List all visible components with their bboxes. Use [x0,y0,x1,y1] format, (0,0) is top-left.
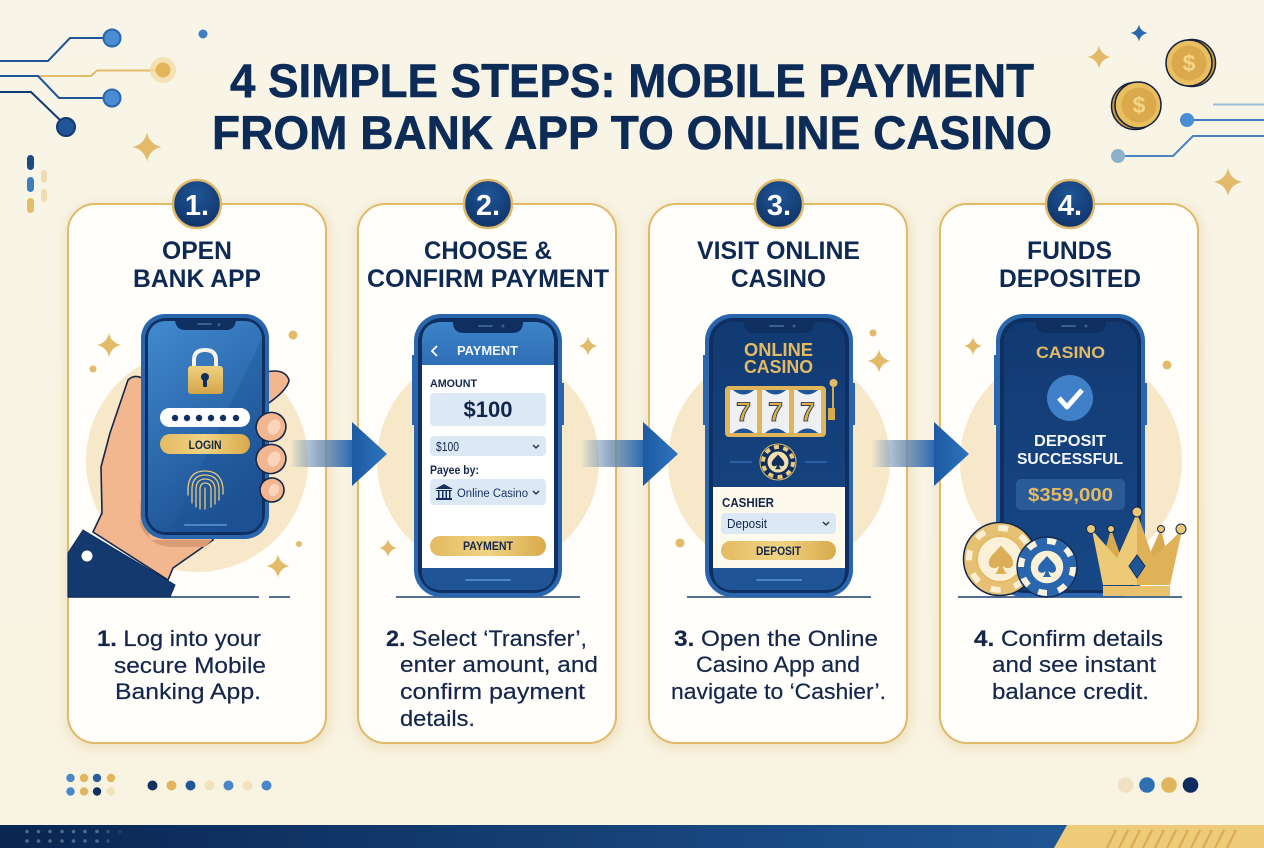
fingernails [265,417,283,498]
panel: step 3 [649,180,907,743]
footer band [0,825,1264,848]
deposit button: DEPOSIT [756,544,802,558]
description 4: and see instant [992,652,1157,677]
balance box [1016,479,1125,510]
star and dots 3 [676,330,890,548]
arrow: step 2 to 3 [581,422,678,486]
heading 3: CASINO [731,265,826,293]
backdrop circle 2 [377,350,599,572]
phone 1 [141,314,269,539]
fingers [251,408,291,506]
deposit select: Deposit [727,517,767,531]
heading 1 [133,237,261,293]
number badge 3: 3. [767,190,791,222]
slot machine: 7 [736,397,751,427]
cuff button [82,550,92,562]
heading 4: DEPOSITED [999,265,1141,293]
pills decoration [27,155,47,213]
description 4: 4. Confirm details [974,626,1163,651]
payee select [430,479,546,505]
online casino logo: ONLINE [744,340,813,360]
payee select: Online Casino [457,488,528,500]
heading 2 [367,237,609,293]
heading 1: OPEN [162,237,232,265]
panel: step 2 [358,180,616,743]
balance box: $359,000 [1028,485,1113,505]
arrow: step 1 to 2 [290,422,387,486]
ground line 3 [687,596,871,598]
description 1 [97,626,266,704]
sleeve [68,530,175,597]
icon: coin lower: $ [1133,92,1146,118]
number badge 1 [173,180,221,228]
star: top left [132,132,162,162]
icon: crown [1086,507,1186,596]
deposit select [721,513,836,534]
star and dot 4 [964,337,1172,370]
payment button [430,536,546,556]
ground line 4 [958,596,1182,598]
heading 3 [697,237,860,293]
description 1: Banking App. [115,679,261,704]
icon: gold chip [964,522,1036,596]
number badge 4: 4. [1058,190,1082,222]
description 4: balance credit. [992,679,1149,704]
payee label: Payee by: [430,463,479,477]
app header: PAYMENT [457,343,518,358]
slot machine: 7 [800,397,815,427]
title: 4 SIMPLE STEPS: MOBILE PAYMENT [230,54,1034,107]
home indicator [184,524,227,526]
stars: top right [1088,24,1242,196]
deposit button [721,541,836,560]
description 1: secure Mobile [114,653,266,678]
amount label: AMOUNT [430,378,477,390]
hand behind phone [93,376,213,580]
online casino logo [744,340,813,377]
number badge 2 [464,180,512,228]
login button [160,434,250,454]
phone 2 [412,314,564,597]
amount box [430,393,546,426]
card 2 [358,204,616,743]
description 2: details. [400,706,475,731]
backdrop circle 1 [86,350,308,572]
number badge 4 [1046,180,1094,228]
number badge 2: 2. [476,190,500,222]
card 3 [649,204,907,743]
icon: padlock [188,350,223,394]
cashier label: CASHIER [722,496,774,510]
number badge 1: 1. [185,190,209,222]
icon: blue chip [1017,537,1077,597]
phone 4 [994,314,1147,597]
title: FROM BANK APP TO ONLINE CASINO [212,106,1052,159]
amount select: $100 [436,440,459,454]
arrow: step 3 to 4 [872,422,969,486]
circuit decoration: top left [0,30,208,136]
circuit decoration: top right [1111,104,1264,163]
phone shadow on palm [140,500,212,547]
icon: check [1047,375,1093,421]
deposit successful: DEPOSIT [1034,433,1106,450]
description 2: confirm payment [400,679,586,704]
icon: coin upper [1166,40,1216,86]
phone 3 [703,314,855,597]
stars 2 [379,336,598,557]
slot machine: 7 [768,397,783,427]
card 1 [68,204,326,743]
heading 2: CONFIRM PAYMENT [367,265,609,293]
panel: step 1 [68,180,326,743]
heading 4 [999,237,1141,293]
panel: step 4 [940,180,1198,743]
backdrop circle 3 [668,350,890,572]
heading 3: VISIT ONLINE [697,237,860,265]
dot grid: bottom left [66,774,115,796]
icon: coin lower [1112,82,1161,130]
description 3: Casino App and [696,652,860,677]
login button: LOGIN [188,438,222,452]
description 3: 3. Open the Online [674,626,878,651]
dot row: bottom right [1118,777,1198,793]
card shadows [66,205,1202,748]
chip and arrows [730,444,827,480]
finger behind [266,371,289,405]
amount select [430,436,546,456]
description 2 [386,626,598,731]
description 2: 2. Select ‘Transfer’, [386,626,587,651]
card 4 [940,204,1198,743]
star and dots 1 [90,330,302,578]
title [212,54,1052,159]
description 3: navigate to ‘Cashier’. [671,679,886,704]
heading 2: CHOOSE & [424,237,552,265]
ground line 2 [396,596,580,598]
slot machine [725,379,838,437]
backdrop circle 4 [960,350,1182,572]
description 4 [974,626,1163,704]
icon: fingerprint [188,471,223,509]
casino label: CASINO [1036,343,1105,362]
deposit successful: SUCCESSFUL [1017,451,1123,468]
description 1: 1. Log into your [97,626,262,651]
description 3 [671,626,886,704]
online casino logo: CASINO [744,357,813,377]
amount box: $100 [464,397,512,422]
password field [160,408,250,427]
deposit successful [1017,433,1123,468]
description 2: enter amount, and [400,652,598,677]
icon: coin upper: $ [1183,50,1196,76]
payment button: PAYMENT [463,541,513,553]
heading 1: BANK APP [133,265,261,293]
icon: bank [435,484,453,500]
number badge 3 [755,180,803,228]
ground line 1 [68,596,290,598]
dot row: bottom left [148,780,272,790]
heading 4: FUNDS [1027,237,1112,265]
